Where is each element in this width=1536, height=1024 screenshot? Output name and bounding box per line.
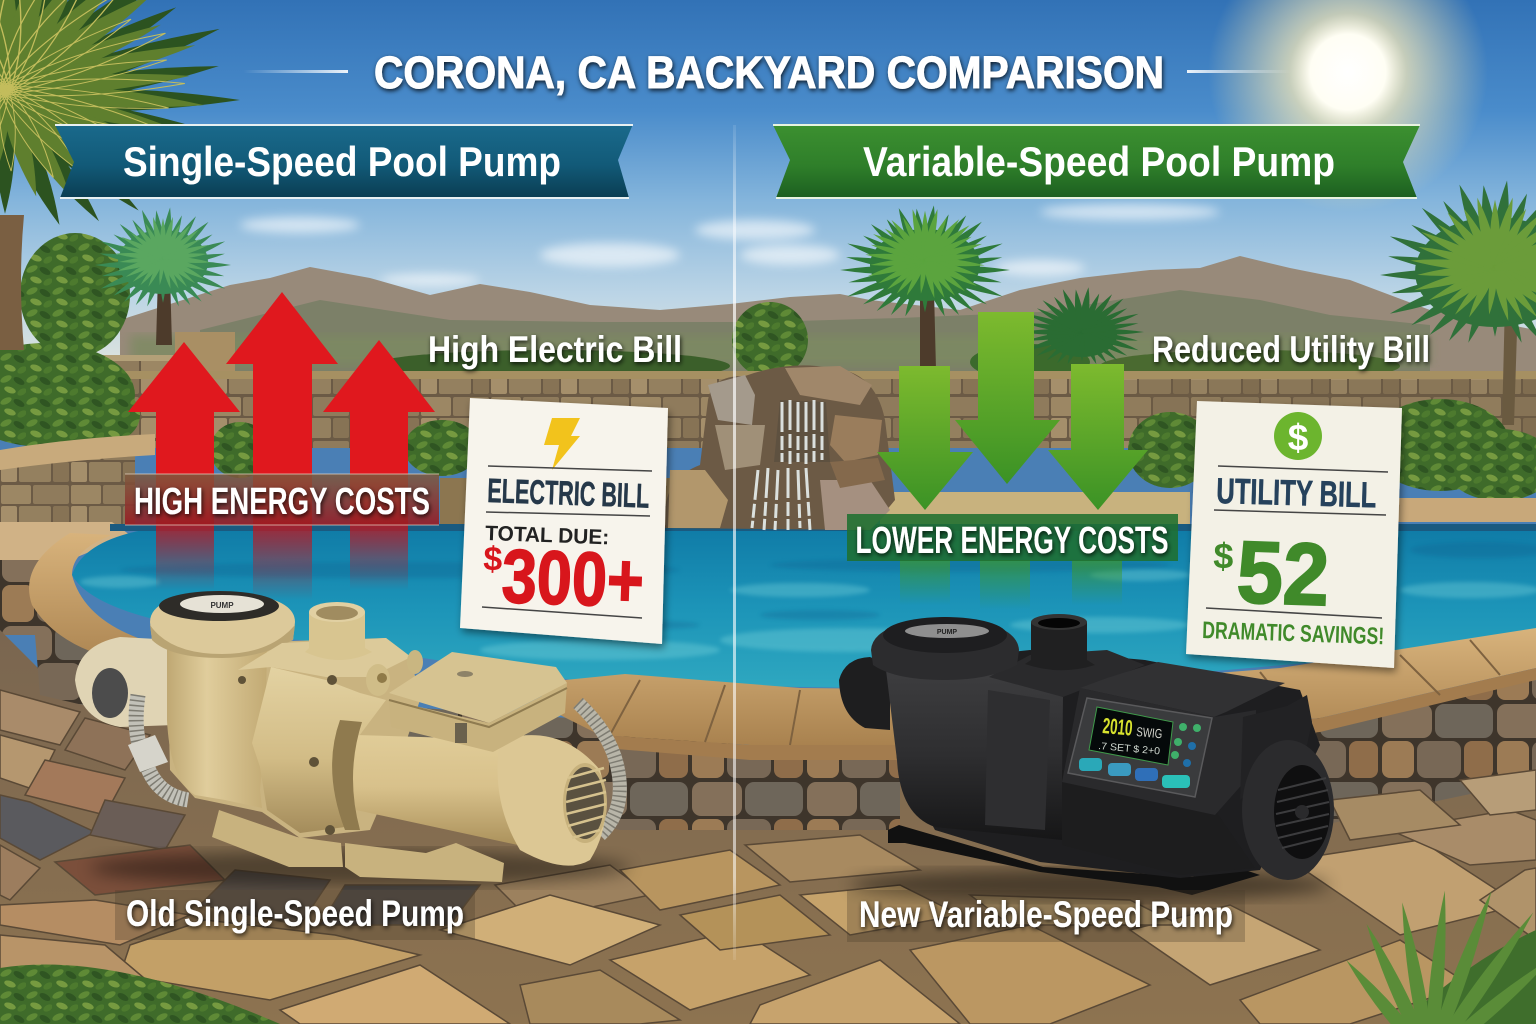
palm: right	[1380, 180, 1536, 425]
lid	[150, 592, 295, 654]
palm: back left	[95, 207, 231, 345]
neck	[305, 612, 372, 660]
distant trees	[20, 233, 1400, 382]
pool coping	[29, 533, 175, 672]
pump silhouette fill	[890, 650, 1320, 878]
patio base	[0, 630, 1536, 1024]
banner: single-speed	[55, 124, 633, 198]
title: CORONA, CA BACKYARD COMPARISON	[374, 47, 1164, 98]
lower body	[1062, 770, 1255, 875]
back wall	[40, 373, 1536, 448]
motor	[353, 735, 541, 850]
display panel	[1068, 698, 1212, 797]
right hose	[578, 703, 620, 835]
display panel: 2010	[1102, 713, 1134, 741]
palm: top left	[0, 0, 240, 350]
pump body	[252, 667, 386, 833]
bill card: electric: $	[483, 540, 503, 579]
controller housing	[1062, 688, 1256, 815]
bill card: utility: DRAMATIC SAVINGS!	[1202, 617, 1385, 650]
label: lower energy costs: LOWER ENERGY COSTS	[856, 520, 1168, 562]
stone retaining walls	[30, 575, 900, 830]
bill card: electric	[460, 398, 668, 644]
label: high energy costs	[125, 474, 439, 525]
label: high energy costs: HIGH ENERGY COSTS	[134, 481, 430, 523]
lid	[871, 617, 1019, 680]
bill card: utility: UTILITY BILL	[1216, 470, 1377, 515]
old beige pump	[75, 591, 630, 886]
banner: variable-speed: Variable-Speed Pool Pump	[863, 138, 1335, 185]
terraces	[440, 478, 730, 525]
bill card: electric: TOTAL DUE:	[485, 522, 610, 549]
small palm	[1020, 287, 1144, 365]
display panel: .7 SET $ 2+0	[1098, 741, 1161, 757]
base	[888, 825, 1260, 895]
strainer and body	[886, 670, 1063, 840]
hedges and bushes	[0, 343, 1536, 501]
foreground plants	[0, 888, 1536, 1024]
caption: old pump: Old Single-Speed Pump	[126, 893, 464, 934]
bill card: utility: 52	[1235, 522, 1331, 624]
icon: dollar coin: $	[1288, 417, 1309, 458]
strainer housing	[167, 650, 267, 808]
sun	[1208, 0, 1488, 212]
label: high electric bill: High Electric Bill	[428, 329, 682, 370]
green arrows down	[877, 312, 1148, 610]
top plate	[238, 638, 411, 677]
bill card: electric: ELECTRIC BILL	[487, 472, 650, 516]
caption: new pump: New Variable-Speed Pump	[859, 894, 1233, 935]
left hose	[136, 695, 188, 800]
raised left planter	[0, 434, 155, 635]
neck	[1025, 622, 1095, 670]
caption: new pump	[847, 890, 1245, 942]
mountains	[120, 256, 1536, 400]
pool water	[72, 524, 1536, 690]
pavers	[0, 690, 1536, 1024]
palm: back centre	[840, 203, 1010, 370]
bill card: electric: 300+	[500, 534, 645, 624]
label: reduced utility bill: Reduced Utility Bill	[1152, 329, 1430, 370]
bill card: utility: $	[1213, 535, 1234, 577]
motor end	[1242, 740, 1334, 880]
icon: lightning bolt	[544, 418, 580, 470]
new black pump	[839, 614, 1334, 901]
junction box	[389, 683, 567, 752]
icon: dollar coin	[1274, 412, 1322, 460]
caption: old pump	[115, 890, 475, 940]
old beige pump: PUMP	[210, 601, 234, 610]
label: lower energy costs	[847, 514, 1178, 562]
base	[212, 810, 343, 867]
red arrows up	[128, 292, 435, 600]
display panel: SWIG	[1136, 724, 1163, 741]
pump silhouette fill	[167, 638, 420, 838]
banner: single-speed: Single-Speed Pool Pump	[123, 138, 561, 185]
top cover	[1080, 662, 1285, 717]
top plate	[989, 650, 1145, 697]
bill card: utility	[1186, 401, 1402, 668]
left volute	[839, 657, 890, 730]
new black pump: PUMP	[937, 629, 957, 636]
left end cap	[75, 637, 175, 727]
banner: variable-speed	[773, 125, 1420, 198]
waterfall rocks	[664, 365, 895, 530]
centre divider	[733, 125, 736, 960]
